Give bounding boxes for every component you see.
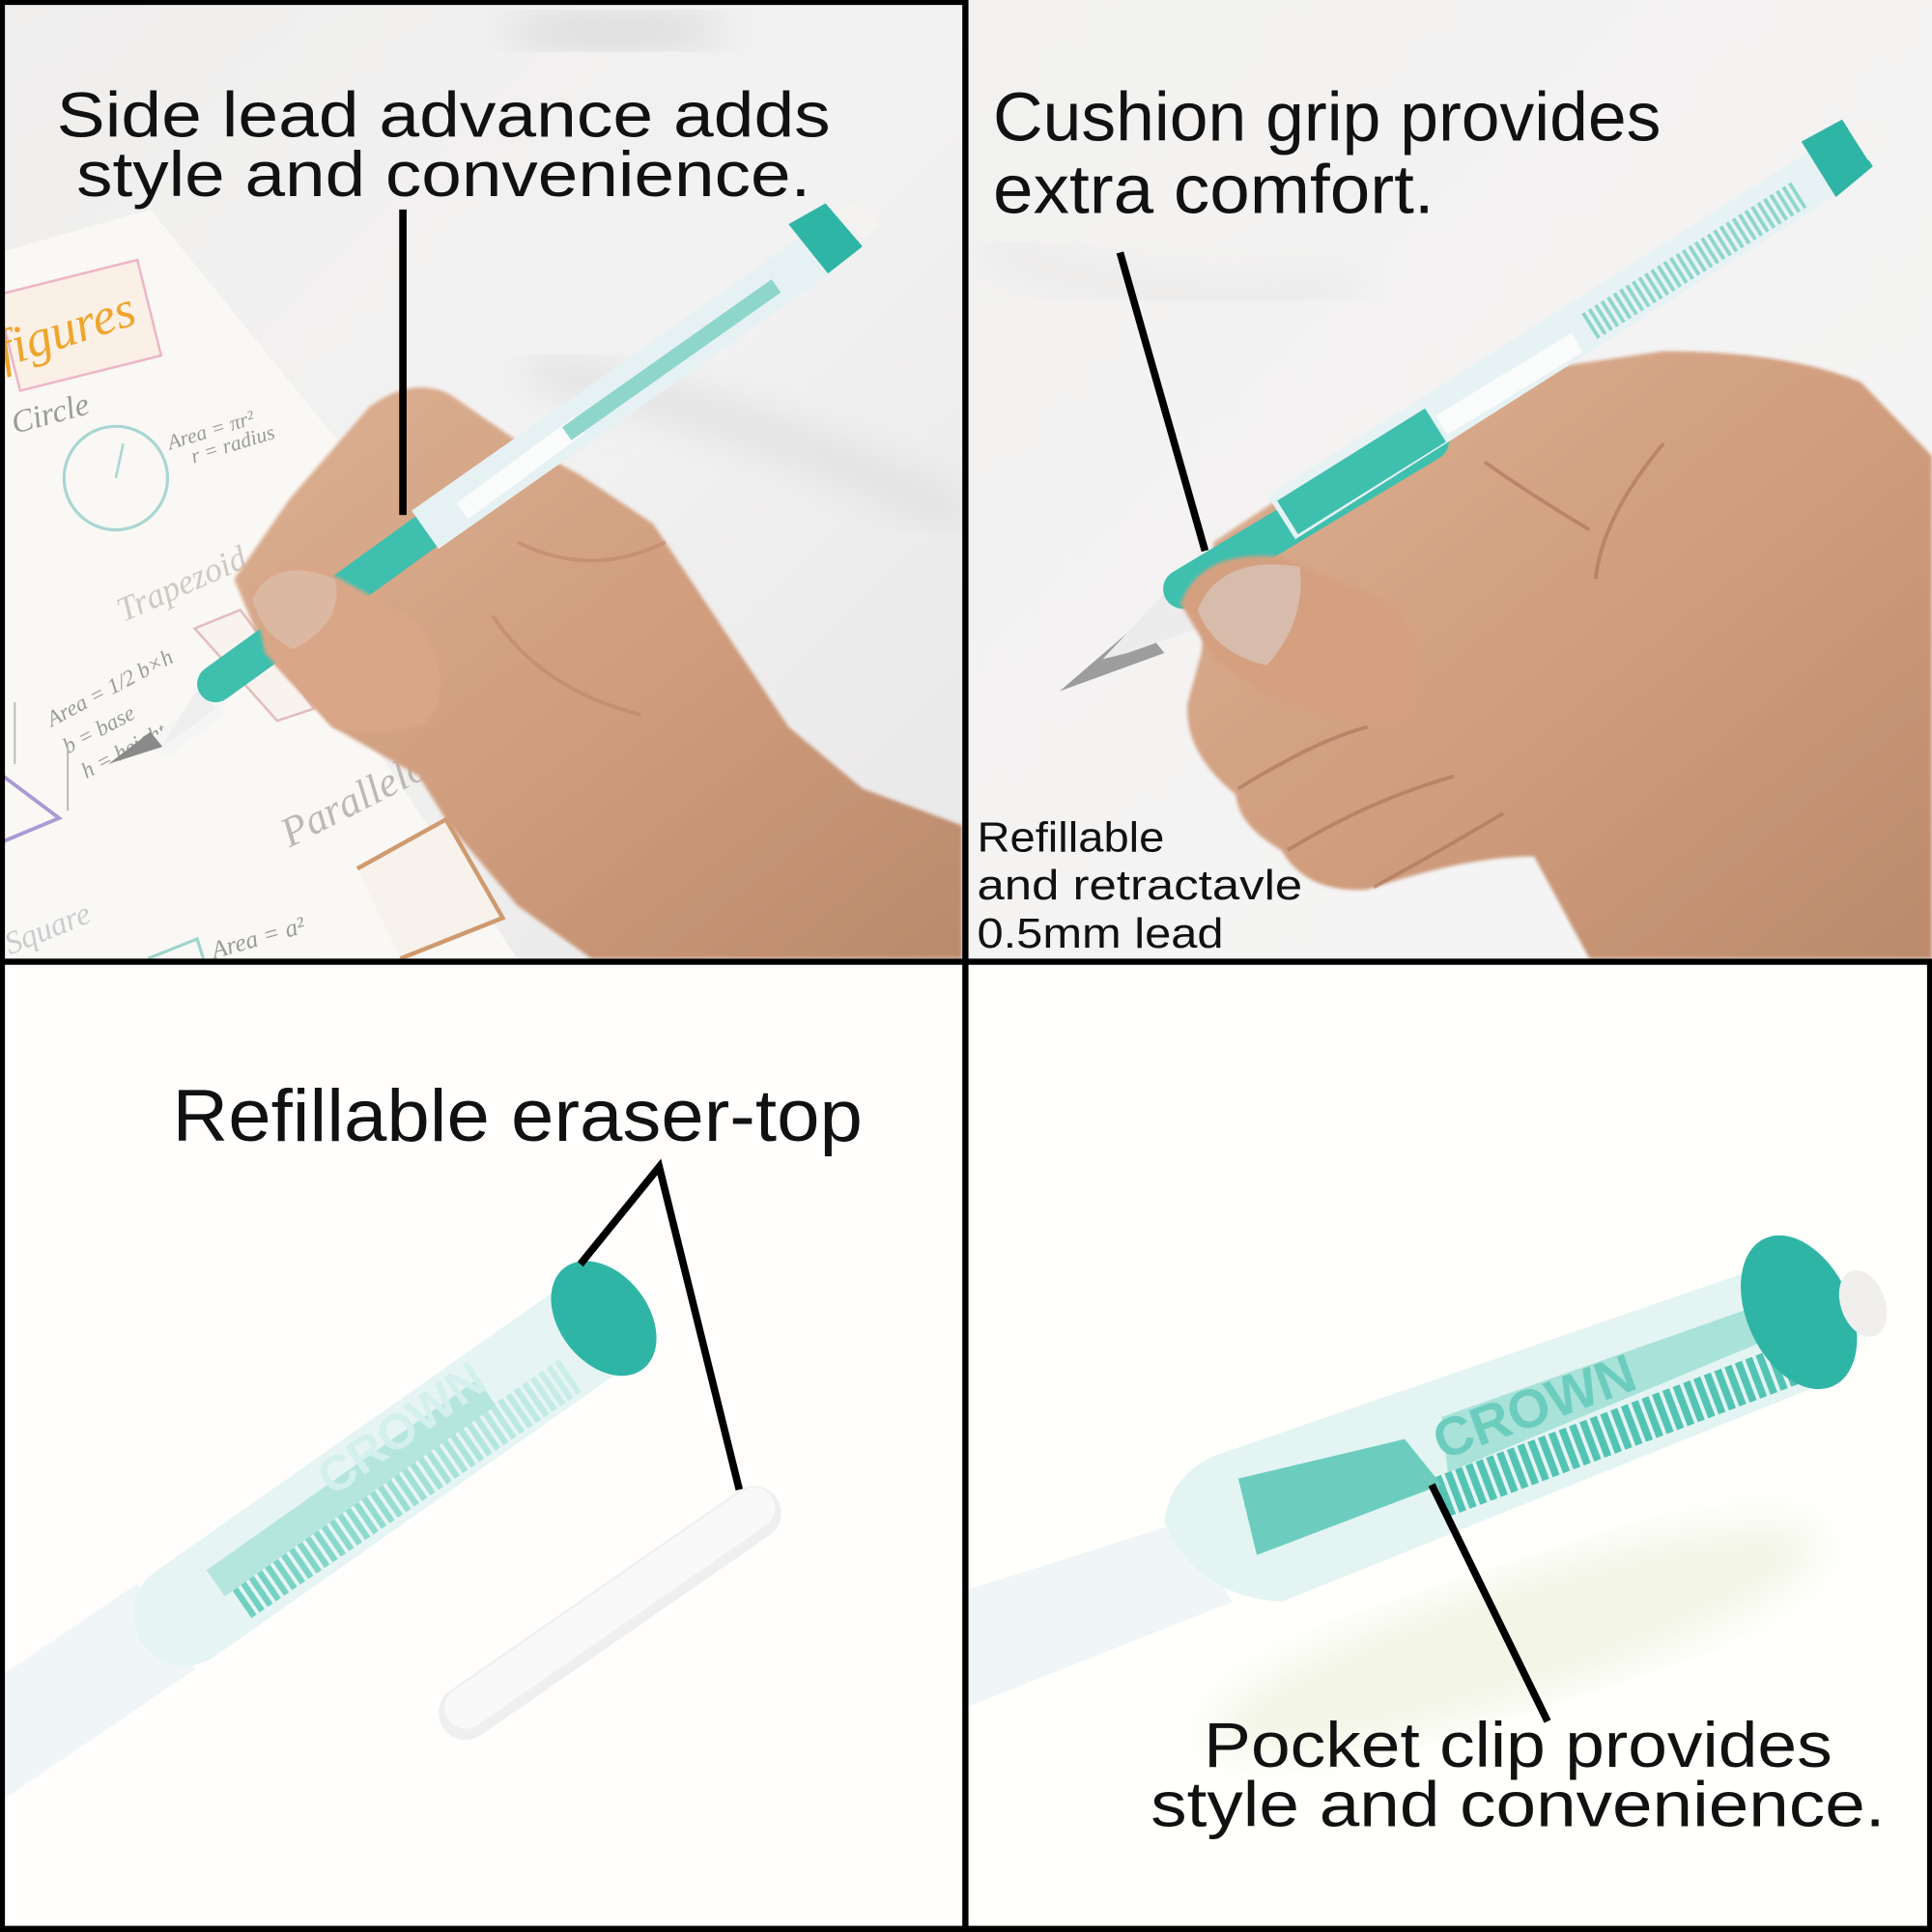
notebook page: r = radius <box>188 420 277 468</box>
callout lines <box>581 1167 739 1490</box>
brand text: CROWN <box>307 1350 496 1506</box>
pencil <box>1060 117 1888 692</box>
panel: side lead advance photo <box>0 0 962 965</box>
panel: eraser photo <box>5 1088 860 1799</box>
text: lead note: and retractavle <box>977 863 1302 909</box>
notebook page <box>0 210 518 965</box>
heading: side lead advance: style and convenience. <box>76 139 810 211</box>
notebook page: b = base <box>59 700 139 758</box>
notebook page: Square <box>0 895 96 962</box>
heading: pocket clip: Pocket clip provides <box>1204 1710 1833 1781</box>
pencil barrel <box>0 1240 678 1756</box>
notebook page: Area = 1/2 b×h <box>41 644 177 732</box>
pencil <box>108 200 880 764</box>
notebook page: Circle <box>8 386 93 441</box>
callout line <box>1120 252 1205 551</box>
notebook page: h = height <box>77 718 171 783</box>
callout line <box>400 210 406 515</box>
eraser <box>466 1508 754 1713</box>
heading: side lead advance: Side lead advance adds <box>57 80 831 152</box>
pencil barrel <box>969 1216 1895 1707</box>
notebook page: Area = a² <box>207 911 308 965</box>
notebook page: Trapezoid <box>111 538 252 629</box>
notebook page: Area = πr² <box>163 406 257 455</box>
heading: pocket clip: style and convenience. <box>1151 1769 1886 1840</box>
thumb <box>258 574 372 730</box>
hand <box>234 387 962 958</box>
callout line <box>1432 1485 1548 1721</box>
panel: pocket clip photo <box>968 1235 1888 1839</box>
text: lead note: 0.5mm lead <box>977 911 1224 957</box>
panel: cushion grip photo <box>969 0 1932 958</box>
notebook page: Parallelog <box>272 733 454 857</box>
heading: cushion grip: Cushion grip provides <box>993 78 1661 156</box>
text: lead note: Refillable <box>977 814 1164 861</box>
heading: eraser top: Refillable eraser-top <box>173 1075 863 1157</box>
thumb <box>1179 553 1312 657</box>
brand text: CROWN <box>1425 1342 1643 1471</box>
hand <box>1187 352 1932 958</box>
heading: cushion grip: extra comfort. <box>993 152 1435 229</box>
